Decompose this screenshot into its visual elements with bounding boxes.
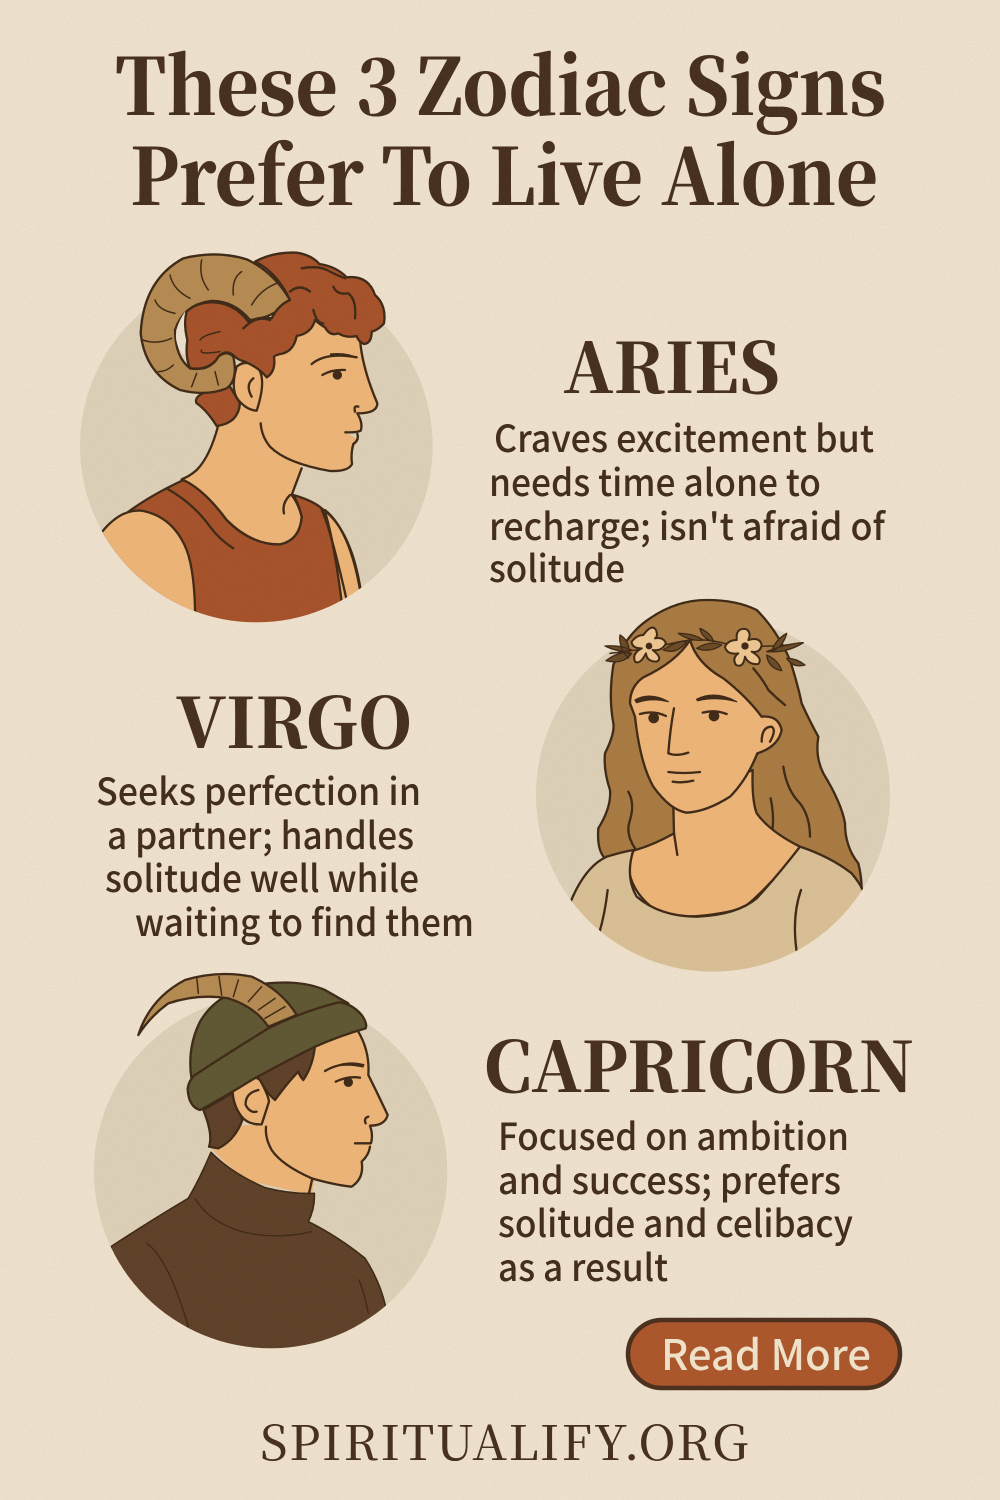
hat dome	[190, 982, 348, 1080]
text: Capricorn description: as a result	[498, 1238, 668, 1292]
text: Aries description: solitude	[489, 539, 625, 593]
title: These 3 Zodiac Signs	[115, 26, 886, 138]
footer: website: SPIRITUALIFY.ORG	[260, 1405, 748, 1474]
text: Capricorn description: Focused on ambition	[498, 1107, 849, 1161]
heading: Virgo: VIRGO	[176, 669, 412, 768]
text: Aries description	[489, 409, 886, 593]
horn	[138, 974, 297, 1035]
button: Read More	[628, 1320, 900, 1388]
title: Prefer To Live Alone	[130, 116, 878, 228]
text: Aries description: Craves excitement but	[494, 409, 874, 463]
text: Virgo description	[96, 762, 474, 947]
text: Capricorn description: solitude and celibacy	[498, 1194, 853, 1248]
title	[115, 26, 886, 228]
text: Virgo description: a partner; handles	[107, 806, 414, 860]
text: Virgo description: Seeks perfection in	[96, 762, 421, 816]
text: Aries description: needs time alone to	[489, 453, 821, 507]
text: Capricorn description: and success; prefers	[498, 1151, 841, 1205]
heading: Aries: ARIES	[563, 314, 780, 413]
face	[203, 1032, 388, 1193]
flower crown	[605, 628, 805, 671]
text: Aries description: recharge; isn't afraid of	[489, 497, 886, 551]
text: Virgo description: solitude well while	[105, 849, 419, 903]
button: Read More: Read More	[661, 1322, 871, 1383]
portrait: Virgo	[536, 600, 890, 990]
text: Virgo description: waiting to find them	[135, 893, 474, 947]
portrait: Aries	[80, 253, 433, 640]
portrait: Capricorn	[94, 974, 447, 1365]
text: Capricorn description	[498, 1107, 853, 1292]
heading: Capricorn: CAPRICORN	[484, 1013, 914, 1112]
hat band	[188, 1002, 366, 1110]
